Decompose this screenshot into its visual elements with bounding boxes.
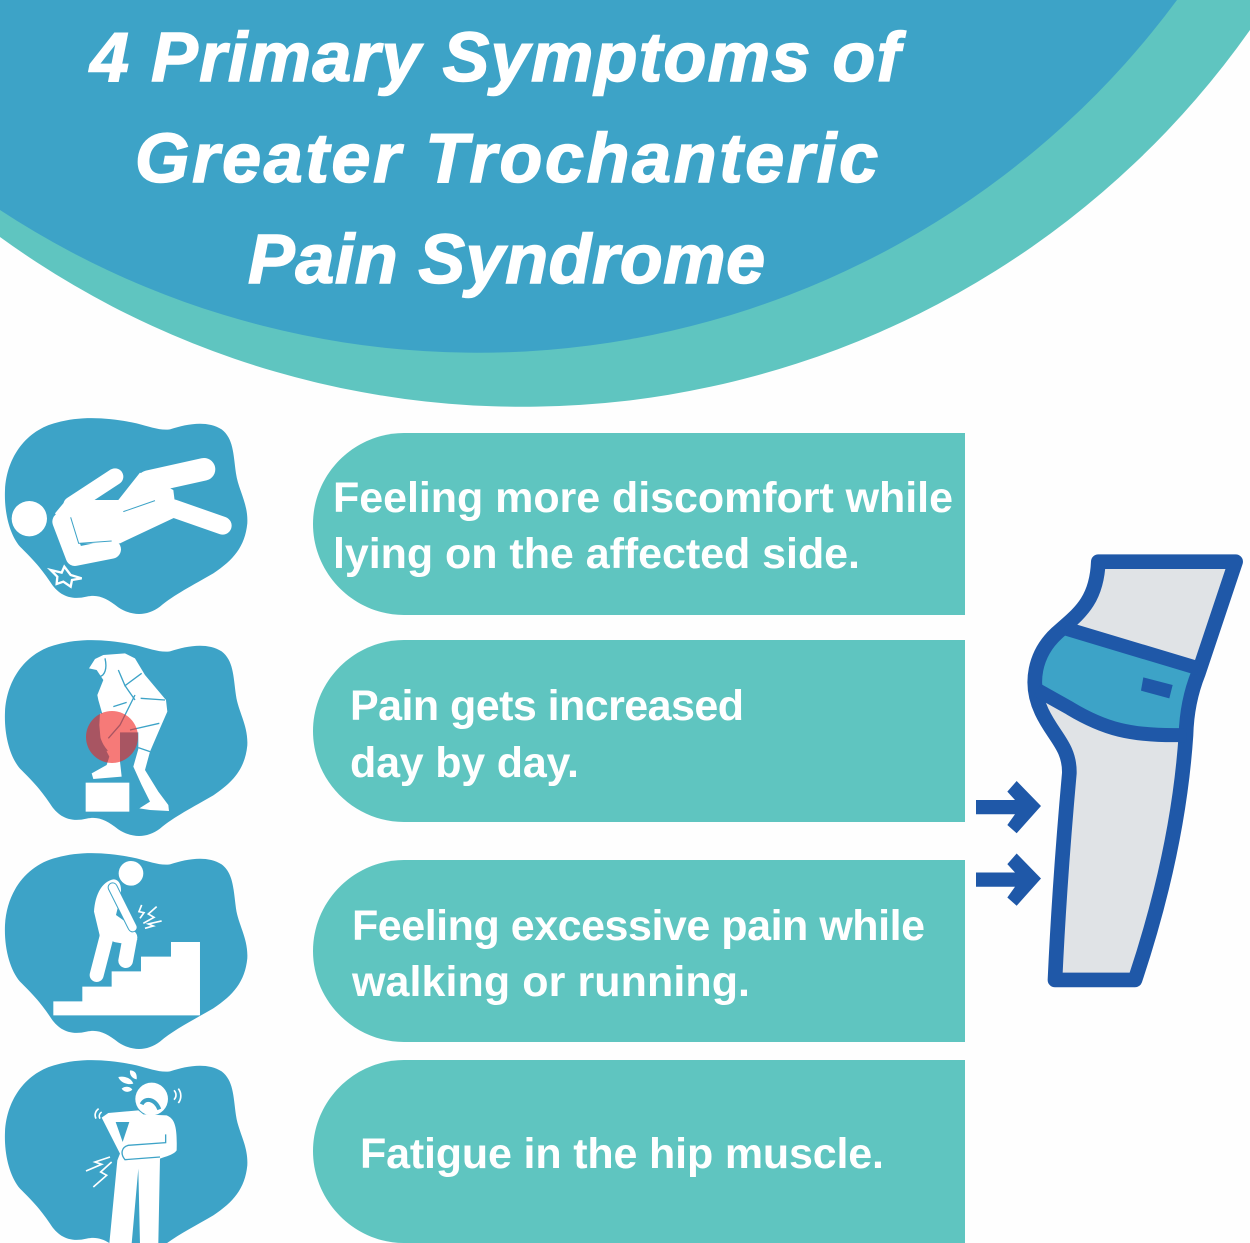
panel: symptom 3 icon, climbing stairs <box>5 853 247 1049</box>
icon: stairs <box>53 942 200 1015</box>
icon: sweat drops <box>118 1070 137 1092</box>
panel: symptom 1 text: lying on the affected side. <box>333 530 860 578</box>
icon: red pain circle <box>86 711 138 763</box>
title: Pain Syndrome <box>248 220 765 298</box>
title <box>88 18 907 298</box>
arrow: lower <box>976 853 1041 906</box>
title: Greater Trochanteric <box>135 119 878 197</box>
panel: symptom 2 text: day by day. <box>350 739 579 787</box>
header banner <box>0 0 1250 407</box>
panel: symptom 3 text: walking or running. <box>351 958 750 1006</box>
icon: hip and thigh with band <box>1035 562 1236 980</box>
icon: figure holding hip <box>102 1083 177 1243</box>
panel: symptom 1 text <box>313 433 965 615</box>
panel: symptom 4 text <box>313 1060 965 1243</box>
icon: lying figure <box>12 469 223 557</box>
title: 4 Primary Symptoms of <box>88 18 907 96</box>
panel: symptom 2 text <box>313 640 965 822</box>
panel: symptom 2 text: Pain gets increased <box>350 682 744 730</box>
panel: symptom 3 text: Feeling excessive pain while <box>352 902 925 950</box>
panel: symptom 3 text <box>313 860 965 1042</box>
panel: symptom 4 icon, hip muscle fatigue <box>5 1060 247 1243</box>
icon: man holding knee <box>86 653 169 812</box>
panel: symptom 1 icon, lying on side <box>5 418 247 614</box>
arrow: upper <box>976 781 1041 833</box>
icon: motion marks and pain bolts <box>86 1089 181 1187</box>
icon: pain burst <box>51 567 82 587</box>
panel: symptom 2 icon, knee pain <box>5 640 247 836</box>
icon: pain bolts <box>139 905 162 928</box>
panel: symptom 1 text: Feeling more discomfort while <box>333 474 953 522</box>
panel: symptom 4 text: Fatigue in the hip muscle. <box>360 1130 884 1178</box>
icon: walking figure <box>94 861 143 975</box>
